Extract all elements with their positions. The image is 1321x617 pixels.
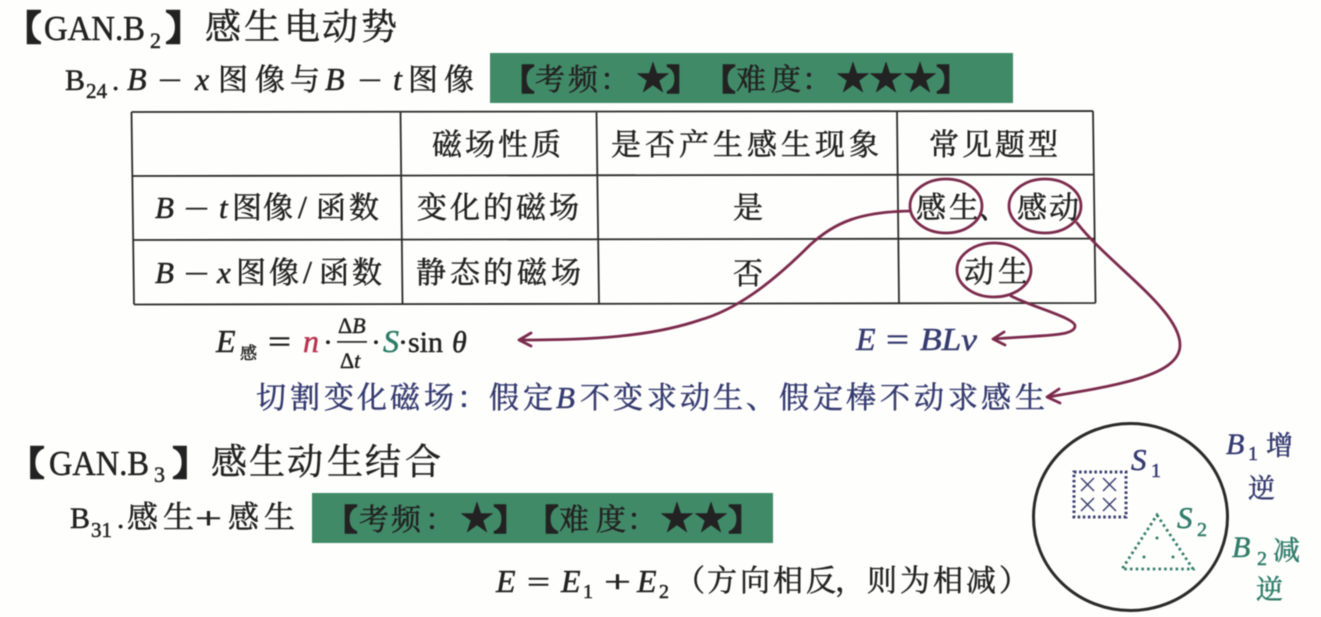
formula: induced EMF: S [383, 323, 399, 359]
label: B2 decreasing, reverse: 减 [1273, 529, 1300, 568]
heading: GAN.B3 combined: 】 [173, 438, 206, 485]
heading: GAN.B2 induced EMF: 【 [7, 1, 41, 50]
label: B1 increasing, reverse [1226, 424, 1293, 506]
formula: sum of EMFs [495, 556, 1029, 603]
table header row: 磁场性质 [432, 120, 561, 164]
badge: frequency and difficulty, B24 [490, 51, 1013, 103]
subheading: B24 B-x and B-t graphs: x [194, 61, 209, 97]
badge: frequency and difficulty, B24: ★ [636, 51, 670, 100]
table row: B-x: / [303, 254, 312, 290]
subheading: B24 B-x and B-t graphs: 图像与 [218, 55, 320, 99]
badge: frequency and difficulty, B31: ★★ [660, 491, 728, 540]
formula: induced EMF: ·sin [398, 326, 443, 359]
table row: B-t: / [298, 189, 307, 225]
table row: B-x: 静态的磁场 [416, 248, 581, 292]
table row: B-t: 感生、感动 [916, 183, 1079, 227]
note: cutting a changing field: B [556, 380, 575, 415]
table row: B-t [155, 183, 1079, 227]
table row: B-t: − [184, 194, 209, 225]
table row: B-x: 否 [733, 249, 763, 293]
label: B2 decreasing, reverse: 2 [1257, 548, 1267, 570]
table header row: 是否产生感生现象 [611, 120, 879, 164]
subheading: B24 B-x and B-t graphs [65, 55, 474, 103]
table row: B-t: B [155, 190, 174, 225]
subheading: B31 [70, 492, 295, 542]
formula: induced EMF: Δt [340, 348, 361, 373]
table row: B-t: 变化的磁场 [417, 183, 579, 227]
heading: GAN.B3 combined: 3 [154, 462, 165, 487]
subheading: B24 B-x and B-t graphs: B [127, 61, 147, 97]
loop S2 triangle: 2 [1197, 519, 1207, 541]
formula: induced EMF: n [303, 323, 319, 359]
label: B2 decreasing, reverse: B [1232, 531, 1250, 564]
label: B1 increasing, reverse: 逆 [1248, 467, 1275, 506]
formula: motional EMF: = [886, 321, 909, 357]
badge: frequency and difficulty, B31: ★ [460, 491, 494, 540]
subheading: B31: 31 [91, 518, 112, 542]
formula: sum of EMFs: 2 [659, 581, 669, 603]
loop S1 with crosses: 1 [1151, 460, 1161, 482]
annotation circles on question types [910, 179, 1081, 297]
table row: B-x [155, 247, 1028, 293]
formula: sum of EMFs: 1 [583, 581, 593, 603]
formula: sum of EMFs: = [527, 564, 550, 599]
subheading: B24 B-x and B-t graphs: 24 [86, 79, 108, 103]
note: cutting a changing field: 不变求动生、假定棒不动求感生 [580, 373, 1045, 417]
formula: sum of EMFs: （方向相反，则为相减） [675, 556, 1029, 600]
heading: GAN.B2 induced EMF: 2 [150, 28, 161, 53]
subheading: B31: . [117, 503, 124, 535]
loop S2 triangle: S [1177, 500, 1192, 535]
formula: sum of EMFs: E [636, 563, 657, 599]
formula: induced EMF: 感 [240, 339, 257, 364]
table row: B-t: 是 [733, 183, 763, 227]
formula: induced EMF: E [215, 323, 236, 359]
subheading: B24 B-x and B-t graphs: − [358, 65, 382, 97]
table row: B-x: 函数 [319, 248, 382, 292]
badge: frequency and difficulty, B31: 难度： [559, 495, 657, 539]
table: B-t and B-x comparison [132, 111, 1096, 304]
diagram: circular field with two loops [1034, 424, 1228, 610]
subheading: B24 B-x and B-t graphs: B [325, 61, 345, 97]
heading: GAN.B3 combined: GAN.B [49, 444, 149, 483]
label: B1 increasing, reverse: B [1226, 428, 1244, 461]
heading: GAN.B2 induced EMF: GAN.B [44, 9, 145, 48]
badge: frequency and difficulty, B31: 考频： [359, 495, 455, 539]
table header row [432, 120, 1058, 164]
heading: GAN.B3 combined: 【 [11, 438, 44, 485]
formula: sum of EMFs: + [604, 564, 631, 599]
table row: B-x: − [184, 259, 209, 290]
formula: induced EMF: · [323, 326, 333, 359]
badge: frequency and difficulty, B24: 考频： [535, 55, 630, 99]
arrow: induced EMF to formula [519, 211, 910, 346]
heading: GAN.B2 induced EMF [7, 0, 397, 53]
arrow: combined case to note [1047, 223, 1180, 403]
formula: motional EMF: BLv [920, 321, 978, 357]
badge: frequency and difficulty, B24: 【】【】 [505, 58, 966, 99]
subheading: B24 B-x and B-t graphs: . [112, 65, 119, 97]
subheading: B24 B-x and B-t graphs: B [65, 64, 85, 97]
formula: induced EMF: = [268, 323, 291, 359]
subheading: B31: 感生 [228, 492, 295, 537]
arrow: motional EMF to formula [993, 296, 1075, 345]
subheading: B24 B-x and B-t graphs: 图像 [408, 55, 474, 99]
loop S1 with crosses [1074, 442, 1161, 517]
loop S2 triangle [1122, 500, 1207, 569]
label: B1 increasing, reverse: 1 [1248, 443, 1258, 465]
label: B2 decreasing, reverse: 逆 [1256, 568, 1283, 607]
formula: induced EMF: · [371, 326, 381, 359]
label: B2 decreasing, reverse [1232, 529, 1300, 607]
badge: frequency and difficulty, B24: ★★★ [836, 51, 937, 100]
formula: induced EMF: θ [452, 326, 467, 359]
heading: GAN.B3 combined [11, 434, 441, 487]
formula: motional EMF: E [855, 321, 876, 357]
formula: motional EMF [855, 321, 978, 357]
table header row: 常见题型 [929, 120, 1058, 164]
subheading: B31: B [70, 502, 90, 535]
note: cutting a changing field: 切割变化磁场：假定 [256, 373, 553, 417]
formula: induced EMF [215, 313, 467, 373]
loop S1 with crosses: S [1131, 442, 1146, 477]
table row: B-x: 动生 [964, 247, 1028, 291]
heading: GAN.B3 combined: 感生动生结合 [211, 434, 441, 485]
formula: sum of EMFs: E [560, 563, 581, 599]
heading: GAN.B2 induced EMF: 感生电动势 [205, 0, 397, 50]
table row: B-x: B [155, 255, 174, 290]
formula: sum of EMFs: E [495, 563, 516, 599]
heading: GAN.B2 induced EMF: 】 [166, 1, 200, 50]
note: cutting a changing field [256, 373, 1045, 417]
formula: induced EMF: ΔB [338, 313, 366, 338]
subheading: B24 B-x and B-t graphs: − [158, 65, 182, 97]
table row: B-t: t [219, 190, 229, 225]
label: B1 increasing, reverse: 增 [1266, 424, 1293, 463]
table row: B-x: 图像 [236, 248, 299, 292]
subheading: B24 B-x and B-t graphs: t [393, 61, 403, 97]
table row: B-t: 图像 [232, 183, 293, 227]
badge: frequency and difficulty, B24: 难度： [736, 55, 832, 99]
subheading: B31: 感生 [127, 492, 194, 537]
table row: B-x: x [216, 255, 231, 290]
subheading: B31: + [195, 502, 222, 535]
table row: B-t: 函数 [316, 183, 379, 227]
badge: frequency and difficulty, B31: 【】【】 [328, 498, 758, 539]
